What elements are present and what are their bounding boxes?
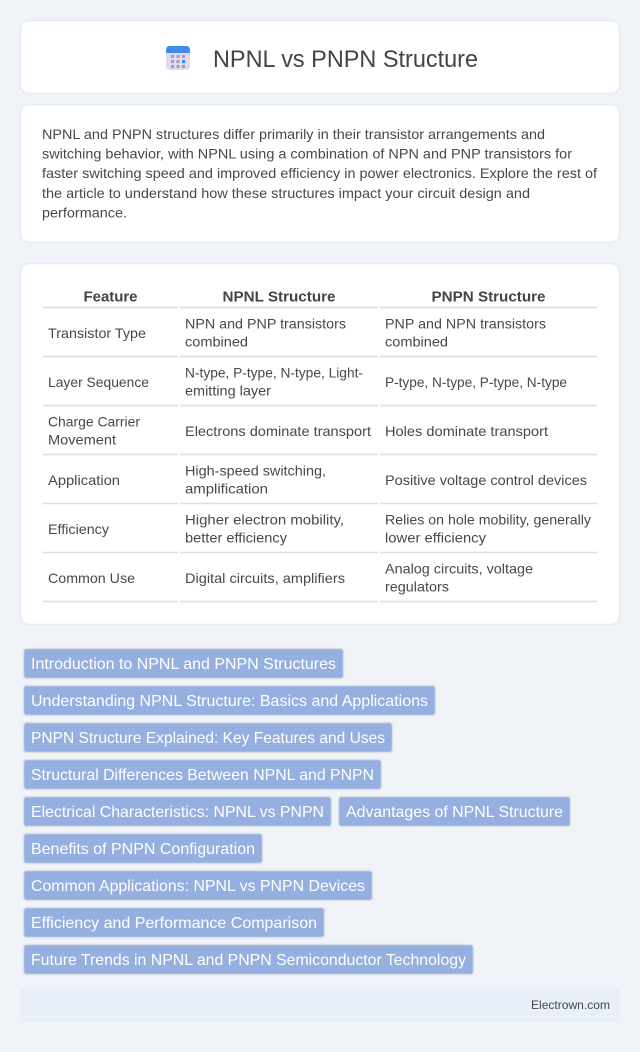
row: efficiency: lower efficiency xyxy=(385,530,486,546)
row: layer sequence: P-type, N-type, P-type, N-type xyxy=(385,374,567,390)
row: layer sequence: N-type, P-type, N-type, Light- xyxy=(185,364,363,380)
pill: electrical characteristics xyxy=(24,796,332,826)
row: efficiency: Higher electron mobility, xyxy=(185,512,344,528)
row: transistor type xyxy=(48,316,546,350)
intro paragraph: switching behavior, with NPNL using a combination of NPN and PNP transistors for xyxy=(42,146,572,162)
pill: introduction xyxy=(24,648,344,678)
row: efficiency xyxy=(48,512,591,546)
row: transistor type: combined xyxy=(385,334,448,350)
pill: introduction: Introduction to NPNL and PNPN Structures xyxy=(31,656,336,673)
row: transistor type: PNP and NPN transistors xyxy=(385,316,546,332)
table header: PNPN Structure xyxy=(432,288,546,306)
row: application xyxy=(48,462,587,496)
table header xyxy=(84,288,546,306)
row: charge carrier movement xyxy=(48,414,548,448)
panel: comparison table xyxy=(20,264,620,624)
row: common use: Digital circuits, amplifiers xyxy=(185,570,345,586)
row: common use: regulators xyxy=(385,578,449,594)
row: charge carrier movement: Holes dominate transport xyxy=(385,423,548,439)
pill: efficiency comparison xyxy=(24,908,324,938)
title: NPNL vs PNPN Structure xyxy=(213,46,478,73)
intro paragraph: performance. xyxy=(42,204,127,220)
panel: title card xyxy=(20,20,620,94)
panel: intro text xyxy=(20,104,620,242)
pill: advantages of NPNL: Advantages of NPNL Structure xyxy=(346,804,563,821)
row: application: Application xyxy=(48,472,120,488)
intro paragraph: NPNL and PNPN structures differ primarily in their transistor arrangements and xyxy=(42,126,545,142)
pill: understanding NPNL xyxy=(24,686,436,716)
row: common use: Common Use xyxy=(48,570,135,586)
row: charge carrier movement: Electrons dominate transport xyxy=(185,423,371,439)
pill: future trends: Future Trends in NPNL and PNPN Semiconductor Technology xyxy=(31,952,466,969)
row: common use: Analog circuits, voltage xyxy=(385,560,533,576)
pill: benefits of PNPN: Benefits of PNPN Configuration xyxy=(31,841,255,858)
row: application: Positive voltage control devices xyxy=(385,472,587,488)
pill: efficiency comparison: Efficiency and Performance Comparison xyxy=(31,915,317,932)
row: common use xyxy=(48,560,533,594)
pill: electrical characteristics: Electrical Characteristics: NPNL vs PNPN xyxy=(31,804,324,821)
row: application: High-speed switching, xyxy=(185,462,326,478)
row: transistor type: Transistor Type xyxy=(48,325,146,341)
icon: calendar xyxy=(166,46,190,70)
footer xyxy=(20,988,620,1022)
row: efficiency: better efficiency xyxy=(185,530,287,546)
pill: common applications xyxy=(24,870,372,900)
pill: PNPN explained: PNPN Structure Explained: Key Features and Uses xyxy=(31,730,385,747)
row: efficiency: Efficiency xyxy=(48,521,109,537)
intro paragraph: the article to understand how these structures impact your circuit design and xyxy=(42,185,530,201)
row: charge carrier movement: Charge Carrier xyxy=(48,414,140,430)
pill: common applications: Common Applications: NPNL vs PNPN Devices xyxy=(31,878,365,895)
row: layer sequence: emitting layer xyxy=(185,382,271,398)
pill: PNPN explained xyxy=(24,722,392,752)
footer: Electrown.com xyxy=(531,998,610,1012)
row: application: amplification xyxy=(185,480,268,496)
row: layer sequence xyxy=(48,364,567,398)
row: transistor type: combined xyxy=(185,334,248,350)
pill: understanding NPNL: Understanding NPNL Structure: Basics and Applications xyxy=(31,693,428,710)
row: transistor type: NPN and PNP transistors xyxy=(185,316,346,332)
intro paragraph: faster switching speed and improved efficiency in power electronics. Explore the rest of xyxy=(42,165,597,181)
row: efficiency: Relies on hole mobility, generally xyxy=(385,512,591,528)
pill: future trends xyxy=(24,944,474,974)
row: layer sequence: Layer Sequence xyxy=(48,374,149,390)
row: charge carrier movement: Movement xyxy=(48,432,116,448)
pill: structural differences: Structural Differences Between NPNL and PNPN xyxy=(31,767,374,784)
intro paragraph xyxy=(42,126,597,220)
pill: structural differences xyxy=(24,760,382,790)
pill: benefits of PNPN xyxy=(24,834,262,864)
table header: Feature xyxy=(84,288,138,306)
pill: advantages of NPNL xyxy=(338,796,570,826)
table header: NPNL Structure xyxy=(222,288,336,306)
